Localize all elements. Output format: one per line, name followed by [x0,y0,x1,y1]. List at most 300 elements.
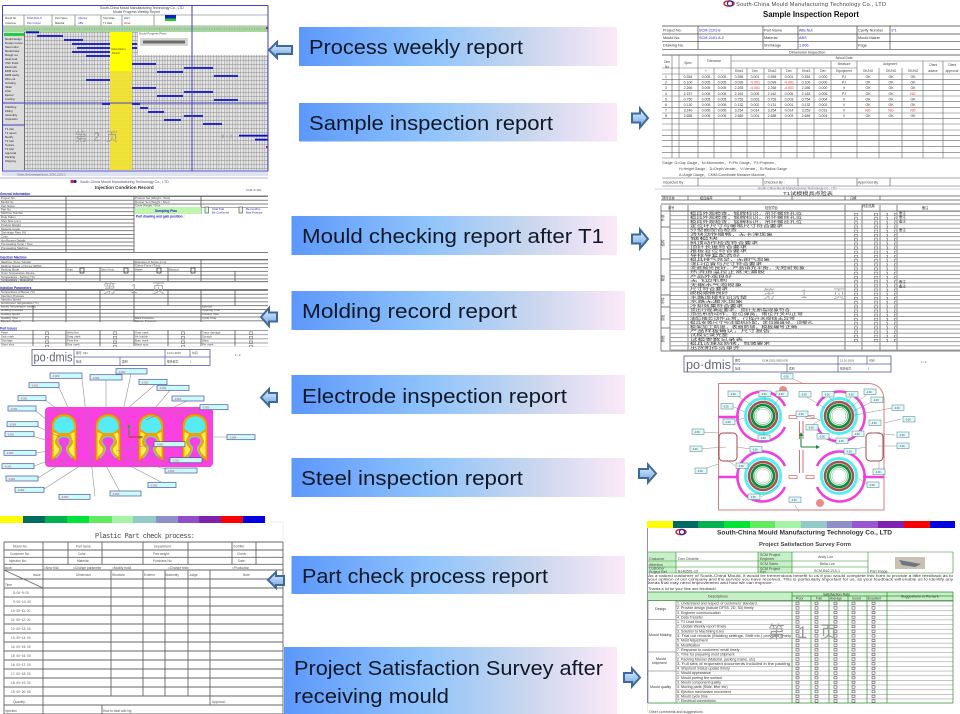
rating table: 4. Trial out records (Molding settings, Shift etc.) provided timely [677,634,791,638]
dimension data table: + [705,69,707,73]
injection parameters section: Ejection [202,304,213,308]
form title: SCM-IC-001 [246,188,262,192]
checklist items: 产品样板确认，尺寸报告 [690,328,770,333]
form table: Injection No: [9,559,27,563]
checklist items: 无飞边毛刺 [690,278,727,283]
rating table: 3. Mould component quality [677,680,721,684]
dimension data table: OK/NG [886,69,897,73]
checklist items: 导柱导套配合好 [690,252,742,257]
Gantt row labels: Shipping [5,159,16,163]
project info table: Dimension Inspection [789,51,825,55]
measurement callouts: -0.00 [808,426,814,430]
Gantt header block: ABS [78,21,83,25]
rating table: 4. Shipment Status update timely [677,667,730,671]
Gantt row labels: Mould design [5,37,22,41]
arrow: to process weekly report [269,42,292,58]
Gantt row labels: Approval [5,151,16,155]
dimension data table: 0.132 [802,103,810,107]
checklist items: 模具外观检查，铭牌标识，吊环螺丝孔位 [690,219,804,224]
dimension data table: 0.005 [751,92,759,96]
Gantt row labels: Grinding [5,81,16,85]
dimension data table: 2.265 [735,86,743,90]
part issues section: Part Issues [0,326,17,330]
injection parameters section: Back Pressure [135,316,154,320]
dimension data table: 0.354 [684,75,692,79]
dimension data table: 3 [665,86,667,90]
dimension data table: − [721,69,723,73]
form title: Plastic Part check process: [95,533,195,541]
rating table: Satisfaction Rate [823,592,850,596]
injection machine section: Temperature - Measuring [1,278,34,282]
dimension data table: OK [910,75,916,79]
dimension data table: 0.131 [768,103,776,107]
checklist grid: 备注 [922,205,929,210]
watermark: page 1: 第 1 页 [763,287,845,301]
gauge legend and sign-off: Checked By : [764,180,785,184]
dimension data table: V [843,98,846,102]
form table: How to deal with Ng [103,709,132,713]
measurement callouts: -0.00 [871,422,877,425]
banner: project satisfaction survey: Project Satisfaction Survey after [294,658,603,680]
form table: 12: 00~13: 00 [11,627,31,631]
measurement callouts: -0.00 [801,394,807,396]
injection parameters section: Cycle Time [202,316,217,320]
callout values: -0.002 [112,492,120,496]
rating table: Average [830,596,842,600]
form table: □Change parameter [73,566,102,570]
report title [655,186,960,197]
general information section: Part Name [1,204,15,208]
banner: steel inspection report [292,458,625,497]
checklist items: 试模记录完整 [690,332,730,337]
form table: Department: [154,545,172,549]
panel: mould checking report after T1: 备注 [899,279,906,284]
measurement callouts [690,374,915,502]
checklist group labels: 结构 [660,239,665,246]
checklist items: 模具外观检查，铭牌标识，吊环螺丝孔位 [690,215,804,220]
customer info table: Bella Lee [820,562,835,566]
dimension data table: 2.689 [735,114,743,118]
dimension data table: advice [928,69,938,73]
dimension data table: 0.003 [751,98,759,102]
dimension data table: V [843,108,846,112]
dimension data table: 8 [665,114,667,118]
Gantt row labels: Texture [5,143,15,147]
callout values: -0.004 [92,376,100,380]
panel: process weekly report Gantt chart [0,5,268,178]
callout values: -0.002 [31,384,39,388]
dimension data table: 0.750 [684,98,692,102]
dimension data table: OK [888,92,894,96]
injection parameters section: Holding Speed [1,312,20,316]
rating table: 3. Full sets of requested documents included in the packing [677,662,790,666]
ring assemblies [718,391,884,501]
rating table: 3. Engineer communication [677,611,721,615]
dimension data table: 0.005 [718,98,726,102]
dimension data table: NG [910,92,916,96]
part issues section: Warp [202,338,209,342]
measurement callouts: -0.00 [866,391,872,394]
Gantt row labels: T3 trial [5,147,14,151]
dimension data table: 7 [665,108,667,112]
checklist items: 模架加工精度，表面防锈，模板编号正确 [690,324,797,329]
customer info table: B14B501-19 [678,570,698,574]
podmis header block: 时间 [192,351,198,355]
report title [724,1,886,19]
dimension data table: 0.132 [735,103,743,107]
part issues section: Gas mark [67,342,80,346]
injection machine section: Oven Temperature Device [1,271,35,275]
general information section: General Information [0,192,30,196]
customer info table: SCM Project [760,567,780,571]
podmis header block: 版本: [76,360,83,364]
Gantt row labels: T1 report [5,131,17,135]
Gantt row labels: Packing [5,155,15,159]
measurement callouts: -0.00 [899,445,905,448]
Gantt header block: Part Name [55,16,68,20]
injection parameters section: Hot Runner Temperature (°C) [1,301,39,305]
dimension data table: 0.753 [768,98,776,102]
general information section: Cycle Weight / Shot [135,204,161,208]
checklist grid: 日期 [850,195,856,200]
form table: Approval: [212,700,226,704]
injection machine section [0,256,268,282]
arrow: to sample inspection report [632,108,648,128]
measurement callouts [2,369,255,499]
project info table: Mould No. [663,36,680,40]
intro paragraph: As a valued customer of South-China Mould, it would be tremendous benefit to us if you would complete this form to provide a little feedback as to [648,573,954,578]
dimension data table: Tolerance [707,59,721,63]
form table: Date: [238,559,246,563]
form title [70,180,262,192]
rating table [648,592,953,703]
part issues section: Drag mark [67,334,81,338]
checklist items: 顶针长度符合要求 [690,244,749,249]
callout values: -0.003 [202,406,210,410]
injection parameters section: Ejector Pressure [135,319,157,323]
dimension data table: 0.005 [718,80,726,84]
checklist items: 尺寸符合要求 [690,286,730,291]
measurement callouts: -0.00 [873,399,879,402]
podmis header block: 版本: [735,367,742,371]
dimension data table: PJ [842,92,846,96]
form table: Dimension [76,573,91,577]
measurement callouts: -0.00 [730,393,736,396]
podmis header block [684,356,927,372]
panel: electrode inspection report [2,350,255,499]
form table: 17: 00~18: 00 [11,672,31,676]
Gantt header block: SCM-2101-8 [27,16,42,20]
rating table: Mould [656,657,666,661]
dimension data table: Shot3 [802,69,810,73]
dimension data table: OK [910,98,916,102]
comments footer: Other comments and suggestions [649,710,703,714]
injection machine section: Machine (Tons / Model) [1,260,31,264]
panel: steel inspection report [684,356,927,512]
dimension data table: 0.005 [702,80,710,84]
Gantt row labels [2,32,25,170]
dimension data table: 0.354 [802,75,810,79]
dimension data table: Spec [684,61,692,65]
gauge legend and sign-off [662,161,960,186]
dimension data table: 0.099 [735,80,743,84]
Gantt grid: Period [112,51,120,55]
form table: Issue: [4,566,13,570]
measurement callouts: -0.00 [752,448,758,452]
project info table: SCM-2101-8 [699,28,721,32]
measurement callouts: -0.00 [846,450,852,454]
callout values: -0.001 [10,407,18,411]
general information section: Machine Number [1,211,23,215]
dimension data table: NG [910,108,916,112]
dimension data table: 0.005 [702,92,710,96]
banner: mould checking report after T1 [292,216,617,255]
checklist group labels: 冷却 [660,297,665,304]
injection parameters section: Closing Time [202,312,219,316]
checklist items: 试模参数记录表 [690,336,745,341]
measurement callouts: -0.00 [694,431,700,434]
dimension data table: 0.014 [785,108,793,112]
checklist grid: 判定结果 [862,203,876,208]
checklist items: 顶出系统动作，复位弹簧，限位开关均正常 [690,311,803,316]
checklist items: 锁模块 [690,236,720,241]
measurement callouts: -0.00 [798,413,804,416]
form table: Material: [77,559,89,563]
measurement callouts: -0.00 [750,496,756,499]
dimension data table: 0.004 [751,114,759,118]
banner: mould checking report after T1: Mould checking report after T1 [302,226,604,248]
injection machine section: Molding Mode [1,268,20,272]
measurement callouts: -0.00 [875,471,881,474]
project info table: Project No. [663,28,682,32]
dimension data table: 0.005 [702,86,710,90]
podmis header block: 图号: 041 [76,351,88,355]
report title: T1试模模具点检表 [783,190,834,197]
checklist items: 热流道温控正常无漏胶 [690,269,767,274]
banner: steel inspection report: Steel inspection report [301,468,523,490]
injection parameters section: Holding Time [1,316,18,320]
checklist group labels: 其他 [660,335,665,342]
dimension data table: Dim [664,60,670,64]
general information section: Runner Set (Weight / Shot) [135,200,170,204]
measurement callouts: -0.00 [761,393,767,396]
Gantt row labels: CNC finish [5,61,19,65]
part issues section: Trace damage [202,330,221,334]
dimension data table: -0.001 [750,80,760,84]
callout values: -0.003 [61,495,69,499]
dimension data table: 0.004 [819,98,827,102]
checklist group labels [660,214,665,342]
panel: mould checking report after T1: 备注 [899,210,906,215]
form table: Check: [237,552,247,556]
colour strip [647,521,955,712]
customer info table: Project Ref [649,570,667,574]
panel: process weekly report Gantt chart: Gantt_Estimate|part|cost_SCM_2101-1 [17,172,66,176]
dimension data table: 0.005 [702,108,710,112]
dimension data table: Measure [838,62,851,66]
callout values: -0.002 [4,465,12,469]
dimension data table: -0.001 [784,80,794,84]
Gantt row labels: T2 trial [5,139,14,143]
part issues section: Short shot [1,342,14,346]
Gantt header block: Alfa Nut [78,16,88,20]
part issues section: Scratch [202,334,212,338]
general information section: Product Set (Weight / Shot) [135,196,170,200]
injection machine section: Diameter of Screw (mm) [135,260,166,264]
callout values: -0.003 [159,386,167,390]
general information section: Shrinkage Rate (%) [1,230,26,234]
Gantt header block: Week [124,21,131,25]
form table: 11: 00~12: 00 [11,618,31,622]
rating table: Mould quality [650,685,671,689]
dimension data table: -0.001 [750,86,760,90]
Gantt row labels: EDM core [5,69,18,73]
checklist items: 斜顶动作检查符合要求 [690,240,760,245]
form title: South-China Mould Manufacturing Technology Co., LTD [80,180,169,184]
gauge legend and sign-off: Gauge: G=Gap Gauge， M=Micrometer， P=Pin Gauge， PJ=Projector， [662,161,778,165]
project info table: Page [858,44,867,48]
Gantt grid [25,32,268,170]
measurement callouts: -0.00 [725,421,731,424]
gauge legend and sign-off: Approved By: [858,180,879,184]
dimension data table: Client [948,63,956,67]
podmis header block: 1 / 2 [235,353,241,357]
dimension data table: 0.004 [819,114,827,118]
dimension data table: OK [910,80,916,84]
arrow: to mould checking report [632,230,648,248]
checklist items: 滑块动作顺畅，无卡滞现象 [690,231,775,236]
dimension data table [662,55,960,158]
panel: mould checking report after T1: 备注 [899,227,906,232]
customer info table: Customer [649,566,665,570]
dimension data table: OK [865,114,871,118]
dimension data table: 0.001 [785,75,793,79]
banner: molding record report [292,291,625,330]
measurement callouts: -0.00 [894,407,900,410]
intro paragraph: your opinion of our company and the service you have received. This is particularly important for us, as your feedback will enable us to identify any [648,577,953,582]
podmis header block: SCM-2021-0502-030 [762,358,789,362]
general information section: Part No. [1,208,12,212]
form table: Exterior [144,573,156,577]
part issues section: Weld line [67,330,79,334]
dimension data table: 0.005 [702,114,710,118]
dimension data table: 2 [665,80,667,84]
form table [4,542,283,714]
dimension data table: 1 [665,75,667,79]
form table: Issue [33,573,41,577]
dimension data table: OK [888,75,894,79]
injection machine section: Water [135,268,143,272]
dimension data table: NG [865,108,871,112]
dimension data table: 0.001 [751,75,759,79]
dimension data table: 0.005 [718,108,726,112]
dimension data table: 0.130 [684,103,692,107]
form table: □Modify mold [112,566,131,570]
dimension data table: 0.001 [785,103,793,107]
gauge legend and sign-off: Inspected By : [663,180,685,184]
measurement callouts: -0.00 [791,499,797,502]
general information section: Pre Heating Temp / Time [1,242,33,246]
rating table: 6. Modification [677,643,700,647]
Gantt row labels: Electrode [5,65,17,69]
measurement callouts: -0.00 [723,406,729,408]
rating table: 5. Mold Adjustment [677,639,708,643]
dimension data table: 3.253 [802,108,810,112]
measurement callouts: -0.00 [838,440,844,443]
report title: South-China Mould Manufacturing Technology Co., LTD [736,2,886,8]
rating table: 7. Response to customers' email timely [677,648,740,652]
podmis header block: po·dmis [34,350,72,364]
form title [676,529,893,548]
dimension data table: 5 [665,98,667,102]
Gantt row labels: Assembly [5,113,18,117]
dimension data table: 0.005 [702,75,710,79]
form table: Time [5,583,12,587]
injection parameters section: Holding Pressure [1,308,24,312]
steel plate outline [718,384,884,510]
dimension data table: OK [865,92,871,96]
general information section: Project No. [1,196,15,200]
dimension data table: 0.099 [768,80,776,84]
rating table: Poor [796,596,804,600]
rating table: Suggestions or Remark [901,595,939,599]
dimension data table: OK/NG [908,69,919,73]
panel: mould checking report after T1: 备注 [899,214,906,219]
injection machine section: Temperature - Setting (°C) [1,275,35,279]
report title: Sample Inspection Report [763,10,859,19]
callout values: -0.001 [118,370,126,374]
dimension data table: V [843,86,846,90]
dimension data table: Client [929,63,937,67]
checklist items: 分型面配合检查 [690,227,739,232]
dimension data table: 0.100 [684,80,692,84]
dimension data table: V [843,103,846,107]
dimension data table: -0.001 [784,86,794,90]
dimension data table: 3.240 [684,108,692,112]
dimension data table: 2.162 [735,92,743,96]
callout values: -0.002 [172,459,180,463]
injection machine section: Semi Auto [101,268,115,272]
rating table: Design [655,607,666,611]
dimension data table: Actual Data [835,56,853,60]
checklist items: 油缸抽芯动作正常，行程开关接线无异常 [690,315,795,320]
checklist group labels: 顶出 [660,314,665,321]
banner: project satisfaction survey: receiving mould [294,686,449,708]
general information section: Sampling Plan [155,209,177,213]
dimension data table: approval [946,69,959,73]
project info table [662,26,960,55]
injection parameters section: Injection Speed [1,298,21,302]
dimension data table: 2.162 [768,92,776,96]
dimension data table: OK [910,103,916,107]
dimension data table: PJ [842,80,846,84]
rating table: 4. Moving parts (Slide, lifter etc) [677,685,728,689]
dimension data table: Judgment [883,62,897,66]
project info table: Material [764,36,778,40]
dimension data table: OK [888,114,894,118]
arrow: to part check process report [268,572,284,588]
panel: process weekly report Gantt chart: 第 2 页 [221,133,233,139]
callout values: -0.001 [20,397,28,401]
dimension data table: 2.266 [684,86,692,90]
podmis header block [32,350,241,366]
dimension data table: 0.005 [718,92,726,96]
rating table: 1. Time for preparing mold shipment [677,653,735,657]
report title: South-China Mould Manufacturing Technology Co., LTD [758,186,837,190]
dimension data table: 4 [665,92,667,96]
podmis header block: 11.01.2016 [167,351,181,355]
Gantt row labels: EDM cavity [5,73,20,77]
